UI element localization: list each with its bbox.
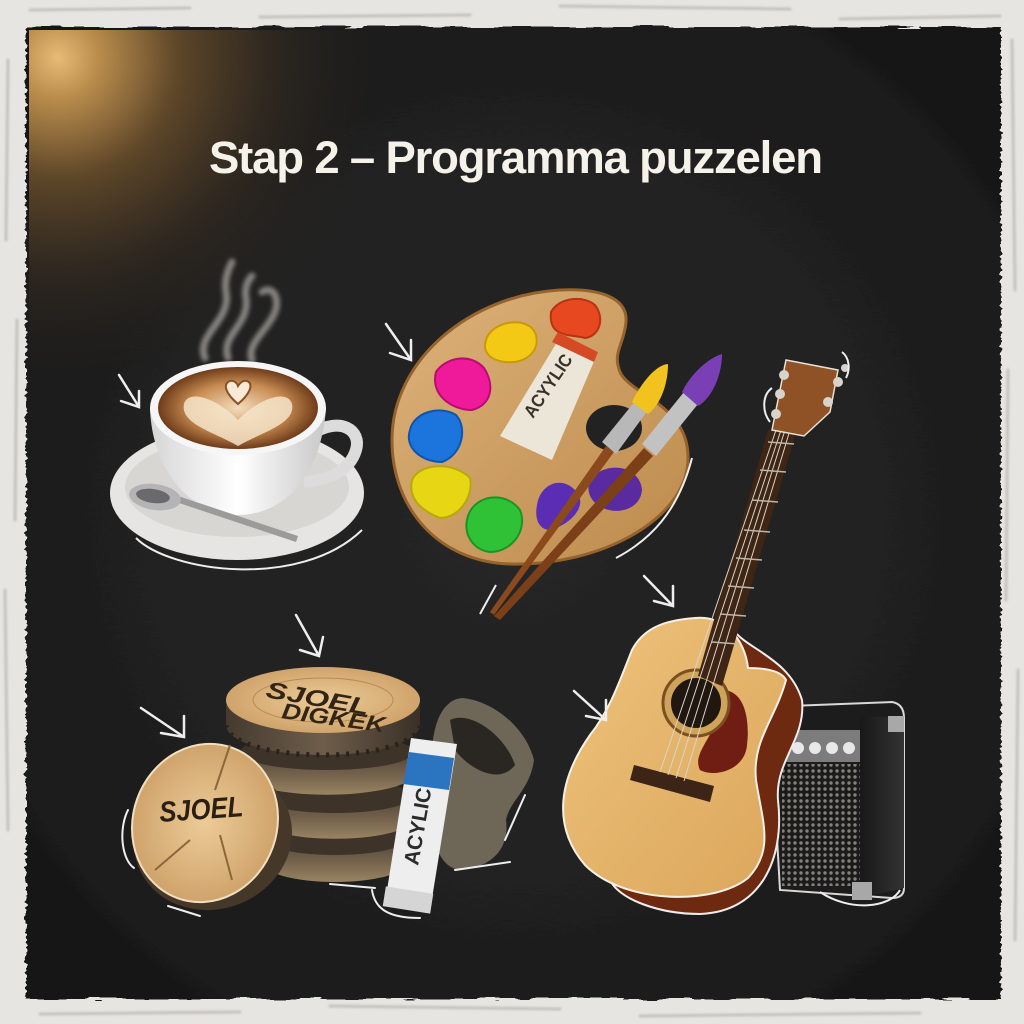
icon: guitar and amplifier <box>563 352 904 914</box>
arrow: wood stack <box>296 615 323 656</box>
sketch lines around wood <box>122 795 525 918</box>
guitar body <box>563 618 786 897</box>
arrow: guitar neck <box>644 576 673 606</box>
icon: acrylic paint tube <box>383 738 457 914</box>
arrow: palette <box>386 324 411 360</box>
bridge <box>630 765 714 802</box>
icon: coffee cup on saucer <box>110 262 364 569</box>
icon: bag <box>430 698 534 870</box>
paint tube <box>500 332 598 460</box>
cup body <box>150 408 326 515</box>
icon: sjoel wood stack <box>226 667 420 882</box>
icon: paint palette <box>392 290 722 620</box>
paint tube: ACYYLIC <box>520 350 577 421</box>
amplifier <box>770 702 904 900</box>
sound hole <box>663 670 729 736</box>
arrow: guitar body <box>574 691 606 720</box>
saucer <box>110 426 364 560</box>
frets <box>712 442 794 644</box>
sketch line <box>820 890 900 905</box>
sketch lines <box>480 458 692 614</box>
arrow: coffee <box>119 375 139 407</box>
icon: sjoel wood slice: SJOEL <box>158 791 244 829</box>
icon: sjoel wood stack: SJOEL <box>264 676 371 720</box>
title: Stap 2 – Programma puzzelen <box>209 132 823 183</box>
icon: acrylic paint tube: ACYLIC <box>400 786 436 867</box>
cup handle <box>304 426 357 482</box>
steam <box>203 262 277 360</box>
pickguard <box>698 690 748 773</box>
brushes <box>490 354 722 620</box>
palette board <box>392 290 688 564</box>
headstock <box>772 360 838 436</box>
strings and neck <box>698 430 796 686</box>
icon: sjoel wood stack: DIGKEK <box>280 698 389 738</box>
paint blobs <box>551 299 600 338</box>
spoon <box>127 481 298 542</box>
icon: sjoel wood slice <box>110 723 312 932</box>
guitar side <box>610 632 802 914</box>
arrow: wood slice <box>141 708 184 737</box>
thumb hole <box>586 405 642 451</box>
coffee with latte art <box>158 367 318 449</box>
sketch line under saucer <box>136 530 362 569</box>
